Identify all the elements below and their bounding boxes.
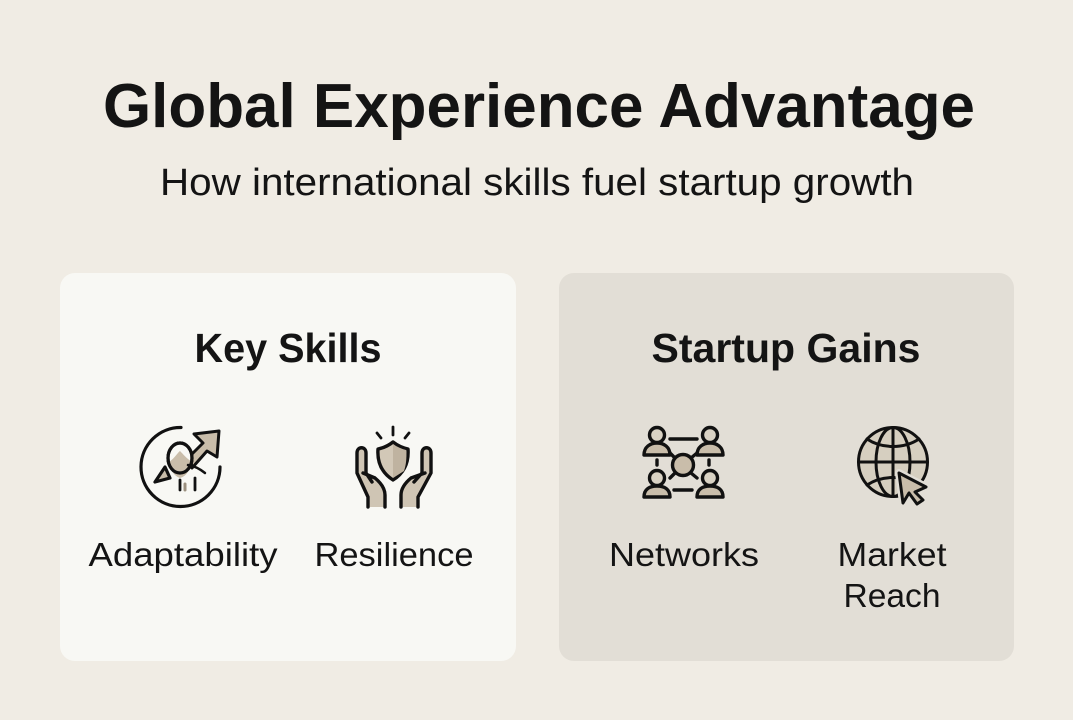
panel: key skills — [60, 273, 516, 661]
icon: resilience — [357, 427, 431, 507]
icon: adaptability — [141, 427, 220, 506]
title: Global Experience Advantage — [103, 72, 975, 141]
subtitle: How international skills fuel startup growth — [160, 162, 914, 204]
label: networks: Networks — [609, 536, 759, 573]
label: market reach — [838, 536, 946, 614]
panel: startup gains — [559, 273, 1014, 661]
label: adaptability: Adaptability — [88, 536, 278, 573]
heading: startup gains: Startup Gains — [652, 325, 920, 371]
label: market reach: Reach — [844, 577, 940, 614]
heading: key skills: Key Skills — [194, 325, 382, 371]
label: market reach: Market — [838, 536, 946, 573]
icon: market reach — [858, 428, 928, 504]
icon: networks — [644, 428, 723, 497]
label: resilience: Resilience — [314, 536, 474, 573]
